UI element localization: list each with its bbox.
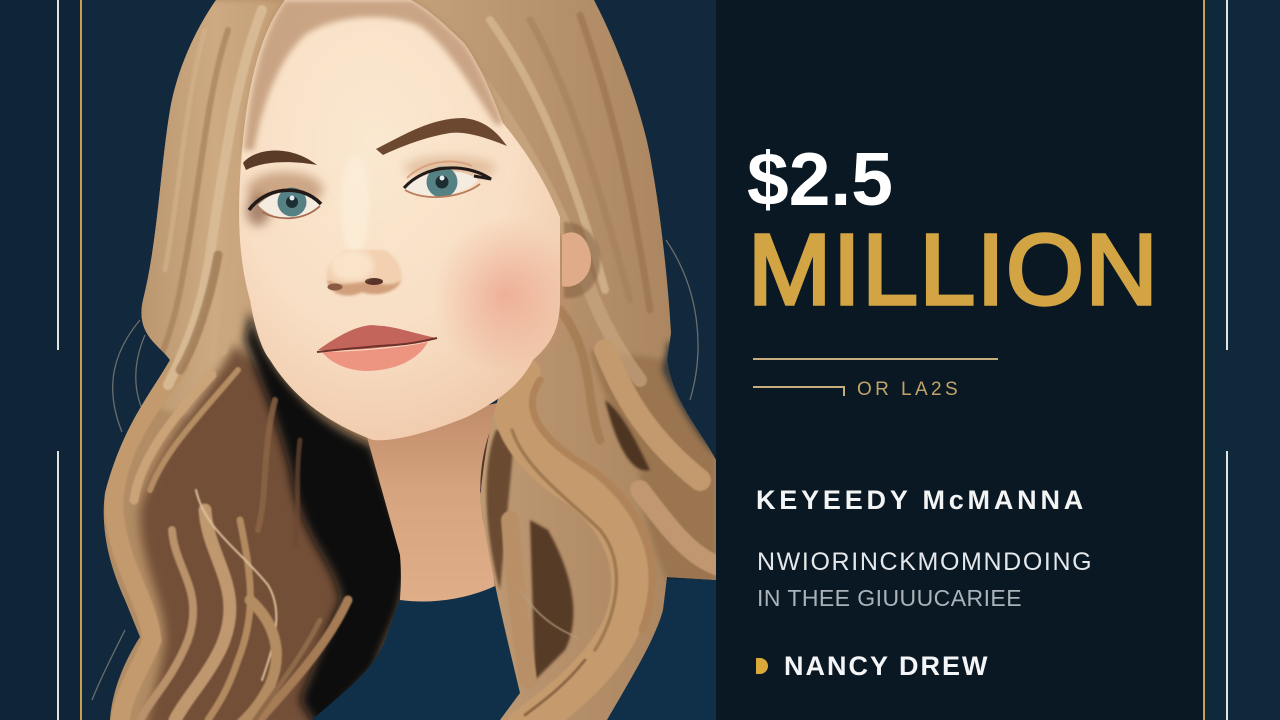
hair: right mass <box>412 0 716 720</box>
hair: left mass <box>104 0 401 720</box>
hair: dark behind neck right <box>480 395 520 600</box>
caption: OR LA2S <box>857 379 961 400</box>
eye: left <box>249 188 321 218</box>
ear <box>562 222 600 298</box>
eyebrow: left <box>243 150 317 170</box>
background band: right <box>1204 0 1280 720</box>
top: sweater <box>300 578 716 720</box>
background band: left <box>0 0 82 720</box>
hair: left brown interior <box>140 345 345 720</box>
frame line: far right upper <box>1226 0 1228 350</box>
portrait illustration <box>92 0 766 720</box>
subtitle line one: NWIORINCKMOMNDOING <box>757 548 1093 576</box>
subtitle line two: IN THEE GIUUUCARIEE <box>757 585 1022 611</box>
neck <box>365 400 512 601</box>
face <box>239 0 560 440</box>
frame line: far right lower <box>1226 451 1228 720</box>
headline amount: $2.5 <box>747 137 893 221</box>
hairline shadow <box>244 0 503 150</box>
divider: short rule with tick <box>753 386 845 396</box>
hair: left dark shadow <box>245 310 412 720</box>
frame line: far left lower <box>57 451 59 720</box>
panel: dark text panel <box>716 0 1204 720</box>
icon: gold marker <box>756 658 768 674</box>
cheek blush <box>433 217 577 373</box>
frame line: gold right <box>1203 0 1205 720</box>
name heading: KEYEEDY McMANNA <box>756 485 1087 515</box>
divider: upper gold rule <box>753 358 998 360</box>
eye: right <box>404 162 491 198</box>
headline unit: MILLION <box>748 214 1159 326</box>
frame line: far left upper <box>57 0 59 350</box>
frame line: gold left <box>80 0 82 720</box>
eyebrow: right <box>376 118 507 155</box>
background band: portrait backdrop <box>82 0 716 720</box>
stray hair strands <box>92 240 698 700</box>
lips <box>317 325 437 371</box>
presenter name: NANCY DREW <box>784 651 990 681</box>
nose <box>326 155 402 296</box>
eye sockets shading <box>246 156 496 226</box>
